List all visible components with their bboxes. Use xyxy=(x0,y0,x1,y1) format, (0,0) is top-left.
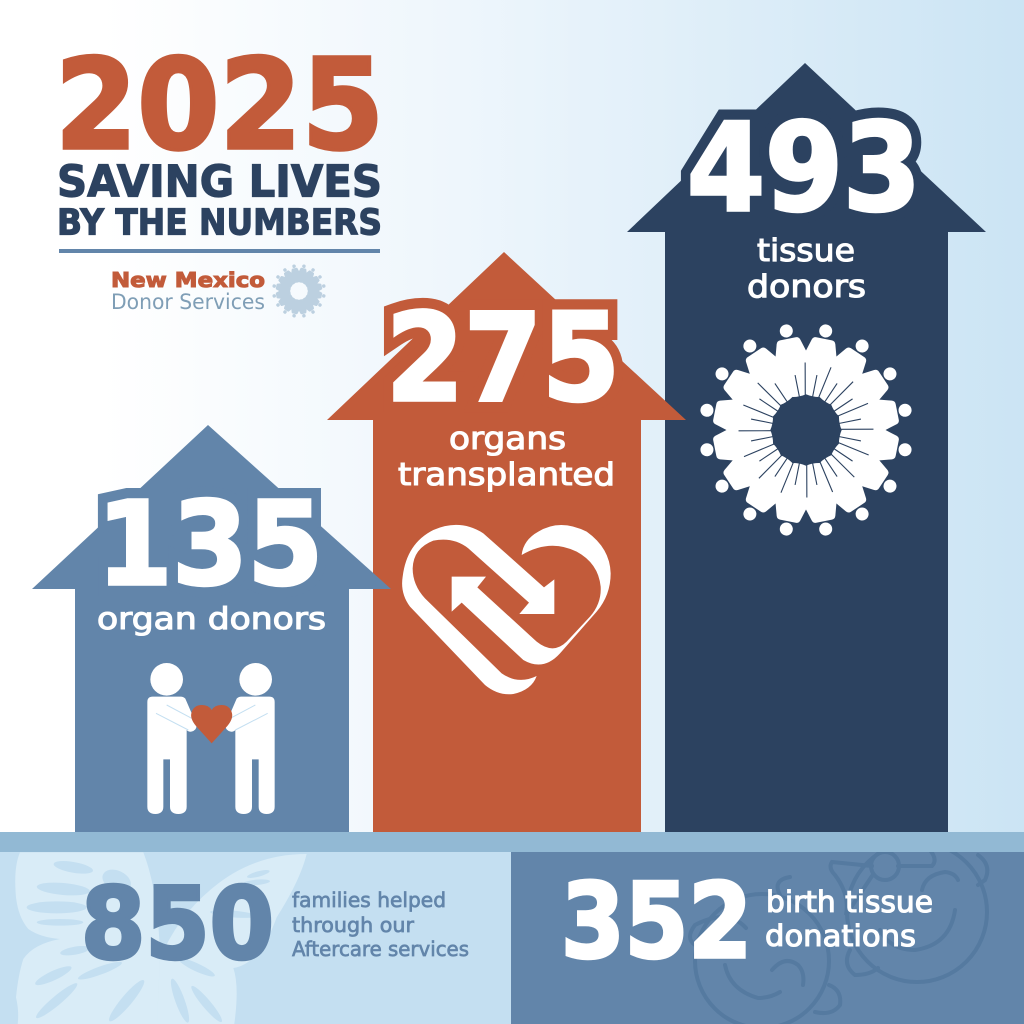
label: donations: donations xyxy=(765,919,916,953)
label: families helped through our Aftercare services: through our xyxy=(292,913,415,937)
stat: 275: 275 xyxy=(386,288,620,429)
year heading: 2025 xyxy=(55,33,384,178)
panel: organs transplanted arrow xyxy=(327,252,686,832)
label: birth tissue: birth tissue xyxy=(766,885,933,919)
base band xyxy=(0,832,1024,852)
logo: New Mexico Donor Services: New Mexico xyxy=(111,268,265,292)
icon: baby faces watermark xyxy=(690,842,987,1024)
stat: 493: 493 xyxy=(687,98,921,239)
label: families helped through our Aftercare services: Aftercare services xyxy=(292,937,469,961)
icon: two people holding heart xyxy=(147,663,275,814)
stat: 275: 275 xyxy=(386,288,620,429)
icon: heart xyxy=(191,705,232,743)
icon: heart with exchange arrows xyxy=(402,525,611,694)
panel: birth tissue donations xyxy=(511,842,1024,1024)
title rule xyxy=(59,249,380,253)
panel: aftercare families xyxy=(0,852,511,1024)
icon: logo sunburst xyxy=(272,264,326,318)
title block xyxy=(55,33,384,253)
icon: ring of people xyxy=(697,321,915,539)
icon: butterfly watermark xyxy=(15,852,307,1024)
subtitle line one: SAVING LIVES xyxy=(57,156,382,208)
logo: New Mexico Donor Services: Donor Services xyxy=(111,290,265,314)
logo: New Mexico Donor Services xyxy=(111,264,326,318)
stat: 493: 493 xyxy=(687,98,921,239)
label: transplanted: transplanted xyxy=(398,457,615,493)
label: organ donors: organ donors xyxy=(97,602,326,637)
panel: organ donors arrow xyxy=(32,425,391,832)
label: organs: organs xyxy=(449,421,566,457)
label: tissue: tissue xyxy=(757,233,855,269)
panel: tissue donors arrow xyxy=(627,63,986,832)
stat: 850: 850 xyxy=(81,867,274,982)
stat: 135: 135 xyxy=(97,478,323,612)
subtitle line two: BY THE NUMBERS xyxy=(57,202,382,244)
label: donors: donors xyxy=(747,269,866,305)
label: families helped through our Aftercare services xyxy=(292,888,469,961)
label: families helped through our Aftercare services: families helped xyxy=(292,888,446,912)
stat: 135: 135 xyxy=(97,478,323,612)
stat: 352: 352 xyxy=(561,862,752,982)
